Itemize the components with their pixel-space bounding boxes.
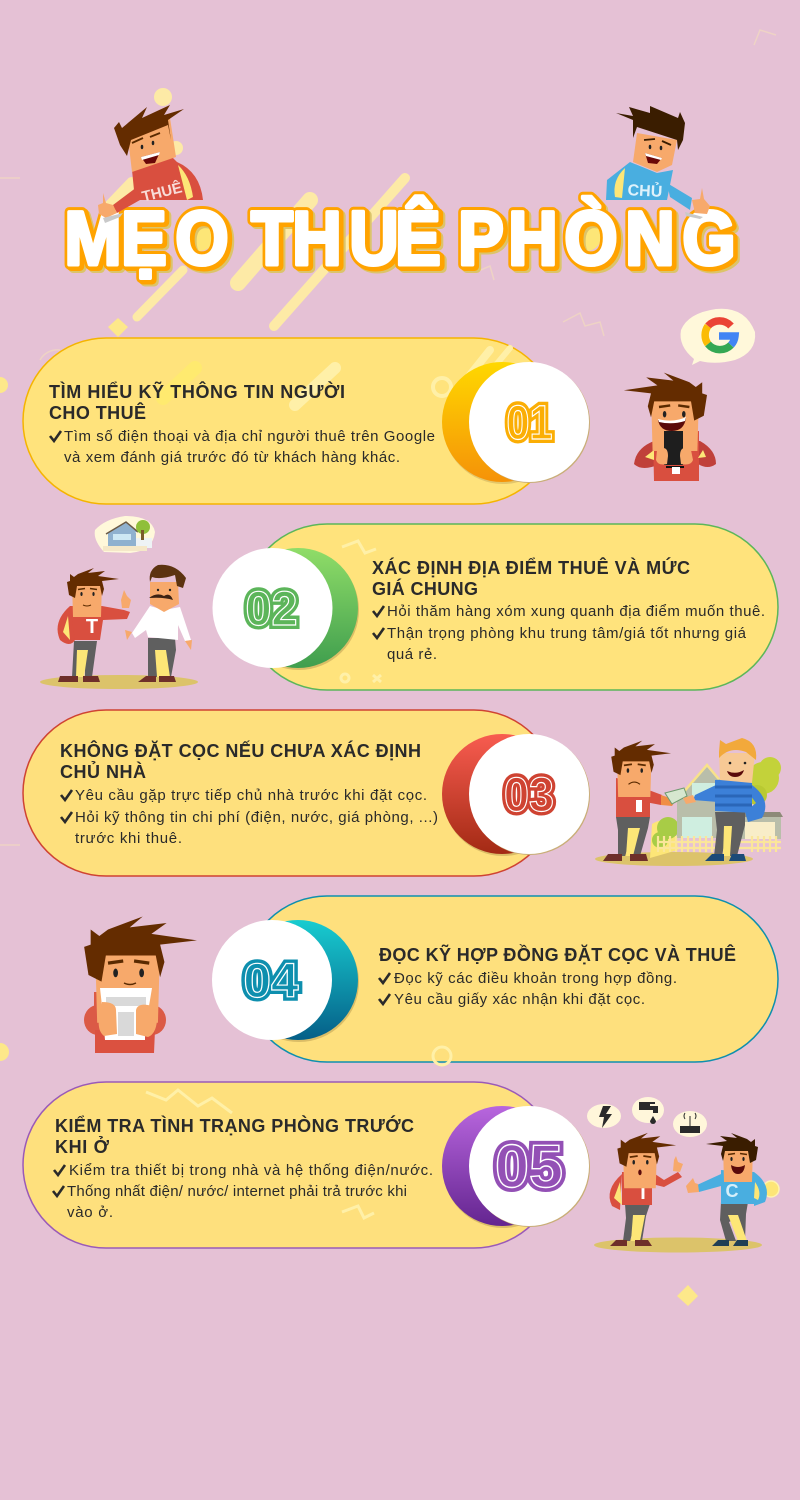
icon: router bubble xyxy=(673,1111,707,1137)
character: tenant holding up THUÊ xyxy=(114,105,203,206)
panel 3 heading xyxy=(60,740,421,782)
panel 1 heading xyxy=(49,381,345,423)
panel 2 text xyxy=(373,603,765,663)
number badge 02: 02 xyxy=(246,583,298,636)
house xyxy=(652,757,783,852)
number badge 03: 03 xyxy=(504,769,554,822)
illustration: tenant talking to moustached neighbour: T xyxy=(86,616,98,638)
title: MẸO THUÊ PHÒNG xyxy=(69,200,740,285)
number badge 05 xyxy=(442,1106,590,1228)
illustration: tenant and landlord agreeing on utilities xyxy=(587,1097,779,1252)
illustration: man with phone and Google bubble xyxy=(624,309,755,481)
panel background xyxy=(23,1082,557,1248)
illustration: paying deposit in front of a house xyxy=(595,738,783,866)
number badge 01 xyxy=(442,362,590,484)
number badge 04: 04 xyxy=(244,955,299,1008)
panel 1 heading: CHO THUÊ xyxy=(49,402,146,423)
panel background xyxy=(23,338,557,504)
panel 4 heading: ĐỌC KỸ HỢP ĐỒNG ĐẶT CỌC VÀ THUÊ xyxy=(379,944,736,965)
illustration: tenant and landlord agreeing on utilities: T xyxy=(637,1182,649,1204)
panel 5 xyxy=(23,1082,590,1248)
panel 5 heading: KIỂM TRA TÌNH TRẠNG PHÒNG TRƯỚC xyxy=(55,1115,414,1136)
number badge 05: 05 xyxy=(495,1133,563,1200)
icon: electricity bubble xyxy=(587,1104,621,1128)
panel 5 text xyxy=(53,1162,433,1221)
panel 4 text xyxy=(379,970,677,1008)
number badge 01: 01 xyxy=(506,397,552,450)
panel 2 text: Hỏi thăm hàng xóm xung quanh địa điểm muốn thuê. xyxy=(387,603,765,620)
panel background xyxy=(244,896,778,1062)
icon: Google speech bubble xyxy=(681,309,755,365)
title: MẸO THUÊ PHÒNG xyxy=(64,196,736,281)
number badge 04: 04 xyxy=(244,955,299,1008)
panel 2 heading: GIÁ CHUNG xyxy=(372,578,478,599)
panel 5 heading: KHI Ở xyxy=(55,1136,110,1157)
dollar bills xyxy=(665,788,687,804)
panel 1 text xyxy=(50,428,435,466)
illustration: man reading contract xyxy=(84,916,197,1053)
panel 5 heading xyxy=(55,1115,414,1157)
icon: thumbs-up hands over title xyxy=(98,183,710,223)
panel 4 text: Đọc kỹ các điều khoản trong hợp đồng. xyxy=(394,970,677,987)
panel 3 xyxy=(23,710,590,876)
title: MẸO THUÊ PHÒNG xyxy=(64,196,736,281)
panel 2 text: quá rẻ. xyxy=(387,646,437,663)
number badge 05: 05 xyxy=(495,1133,563,1200)
illustration: tenant talking to moustached neighbour xyxy=(40,516,198,689)
number badge 03 xyxy=(442,734,590,856)
title: MẸO THUÊ PHÒNG xyxy=(66,197,738,283)
blond man xyxy=(714,812,745,856)
icon: house thought bubble xyxy=(95,516,155,553)
character: tenant holding up THUÊ: THUÊ xyxy=(140,178,184,206)
panel 1 xyxy=(23,338,590,504)
panel 1 text: Tìm số điện thoại và địa chỉ người thuê trên Google xyxy=(64,428,435,445)
panel 3 text: trước khi thuê. xyxy=(75,830,182,847)
panel 3 heading: KHÔNG ĐẶT CỌC NẾU CHƯA XÁC ĐỊNH xyxy=(60,740,421,761)
character: landlord holding up CHỦ xyxy=(606,106,685,201)
panel 3 text: Yêu cầu gặp trực tiếp chủ nhà trước khi đặt cọc. xyxy=(75,787,427,804)
panel background xyxy=(23,710,557,876)
tenant xyxy=(72,641,97,677)
panel 1 text: và xem đánh giá trước đó từ khách hàng khác. xyxy=(64,449,400,466)
icon: water tap bubble xyxy=(632,1097,664,1124)
panel 4 xyxy=(212,896,778,1065)
panel 3 text: Hỏi kỹ thông tin chi phí (điện, nước, giá phòng, ...) xyxy=(75,809,438,826)
number badge 02 xyxy=(212,548,359,670)
panel 1 heading: TÌM HIỂU KỸ THÔNG TIN NGƯỜI xyxy=(49,381,345,402)
illustration: tenant and landlord agreeing on utilities: C xyxy=(726,1181,738,1201)
panel 5 text: Kiểm tra thiết bị trong nhà và hệ thống điện/nước. xyxy=(69,1162,433,1179)
panel background xyxy=(244,524,778,690)
number badge 04 xyxy=(212,920,359,1042)
panel 3 text xyxy=(61,787,438,847)
panel 2 heading: XÁC ĐỊNH ĐỊA ĐIỂM THUÊ VÀ MỨC xyxy=(372,557,690,578)
panel 5 text: vào ở. xyxy=(67,1204,113,1221)
tenant xyxy=(623,1204,650,1241)
panel 2 text: Thận trọng phòng khu trung tâm/giá tốt nhưng giá xyxy=(387,625,747,642)
panel 4 text: Yêu cầu giấy xác nhận khi đặt cọc. xyxy=(394,991,645,1008)
panel 5 text: Thống nhất điện/ nước/ internet phải trả trước khi xyxy=(67,1183,407,1200)
panel 2 xyxy=(212,524,778,690)
moustached man xyxy=(148,638,176,677)
panel 3 heading: CHỦ NHÀ xyxy=(60,761,146,782)
panel 2 heading xyxy=(372,557,690,599)
character: landlord holding up CHỦ: CHỦ xyxy=(627,180,663,201)
sad tenant xyxy=(616,817,650,856)
number badge 01: 01 xyxy=(506,397,552,450)
landlord xyxy=(720,1202,748,1241)
number badge 02: 02 xyxy=(246,583,298,636)
number badge 03: 03 xyxy=(504,769,554,822)
